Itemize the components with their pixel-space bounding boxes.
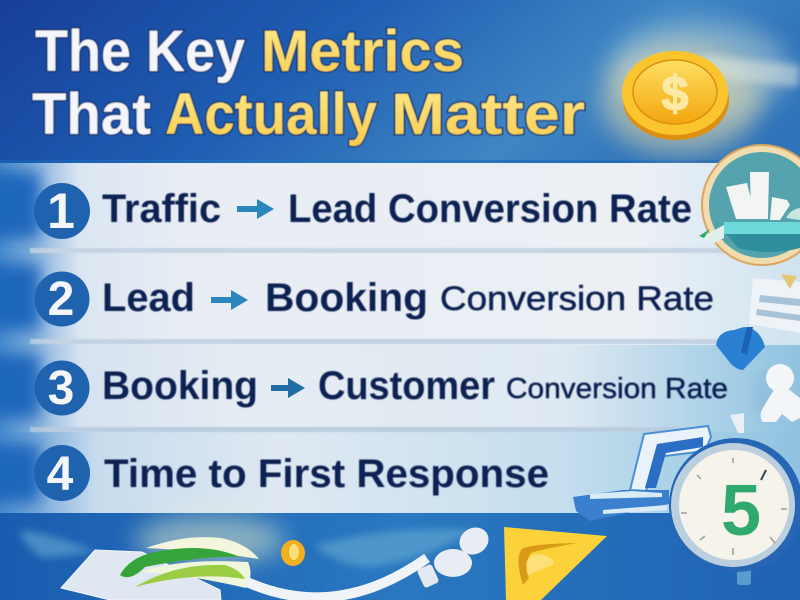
icon: gold dollar coin: [622, 51, 729, 140]
metric 3 text: Booking: [102, 364, 258, 408]
number badge 4: [34, 445, 90, 501]
number badge 1: [34, 183, 90, 239]
arrow 2: [211, 290, 248, 310]
title line 1: The Key: [35, 19, 245, 84]
number badge 4: 4: [47, 448, 74, 501]
arrow 1: [237, 199, 274, 219]
metric 3 text: Conversion Rate: [506, 373, 728, 405]
metric 3 text: [102, 364, 728, 408]
row 4 band: [0, 432, 800, 513]
icon: note card: [749, 274, 800, 333]
title line 1: Metrics: [261, 19, 464, 84]
chart bars: [726, 172, 800, 220]
panel: metric rows: [0, 163, 800, 513]
title line 2: [32, 82, 585, 147]
icon: white slab: [61, 550, 221, 600]
title line 2: Actually: [165, 82, 377, 147]
arrow 3: [271, 378, 305, 398]
metric 2 text: Lead: [102, 276, 195, 320]
icon: white cable with knobs: [247, 522, 493, 597]
timer digit: 5: [721, 471, 761, 551]
number badge 2: 2: [48, 273, 74, 326]
row 2 band: [0, 252, 800, 345]
number badge 3: [34, 360, 90, 416]
bottom decoration: glow behind swoosh: [135, 515, 285, 565]
metric 2 text: Booking: [265, 276, 428, 320]
row 1 band: [0, 163, 800, 252]
icon: small gold coin: [281, 540, 305, 566]
icon: bar chart badge: [699, 145, 800, 265]
icon: laptop: [573, 426, 711, 521]
metric 1 text: Traffic: [102, 187, 221, 231]
number badge 2: [34, 272, 90, 326]
title line 1: [35, 19, 464, 84]
metric 1 text: [102, 187, 692, 231]
icon: person: [752, 364, 800, 422]
icon: stopwatch: [669, 413, 800, 585]
title: [32, 19, 585, 147]
metric 2 text: Conversion Rate: [440, 280, 714, 318]
metric 4 text: Time to First Response: [104, 452, 549, 496]
metric 2 text: [102, 276, 714, 320]
icon: green and white swoosh: [120, 537, 259, 588]
icon: gold dollar coin: $: [662, 68, 689, 121]
bottom decoration: light patches: [20, 529, 475, 567]
icon: yellow triangle: [504, 527, 607, 600]
title line 2: Matter: [391, 82, 585, 147]
metric 1 text: Lead Conversion Rate: [288, 187, 692, 231]
metric 3 text: Customer: [318, 364, 495, 408]
title line 2: That: [32, 82, 151, 147]
number badge 1: 1: [47, 183, 75, 239]
number badge 3: 3: [48, 362, 74, 415]
icon: blue heart: [716, 327, 765, 370]
row 3 band: [0, 345, 800, 432]
